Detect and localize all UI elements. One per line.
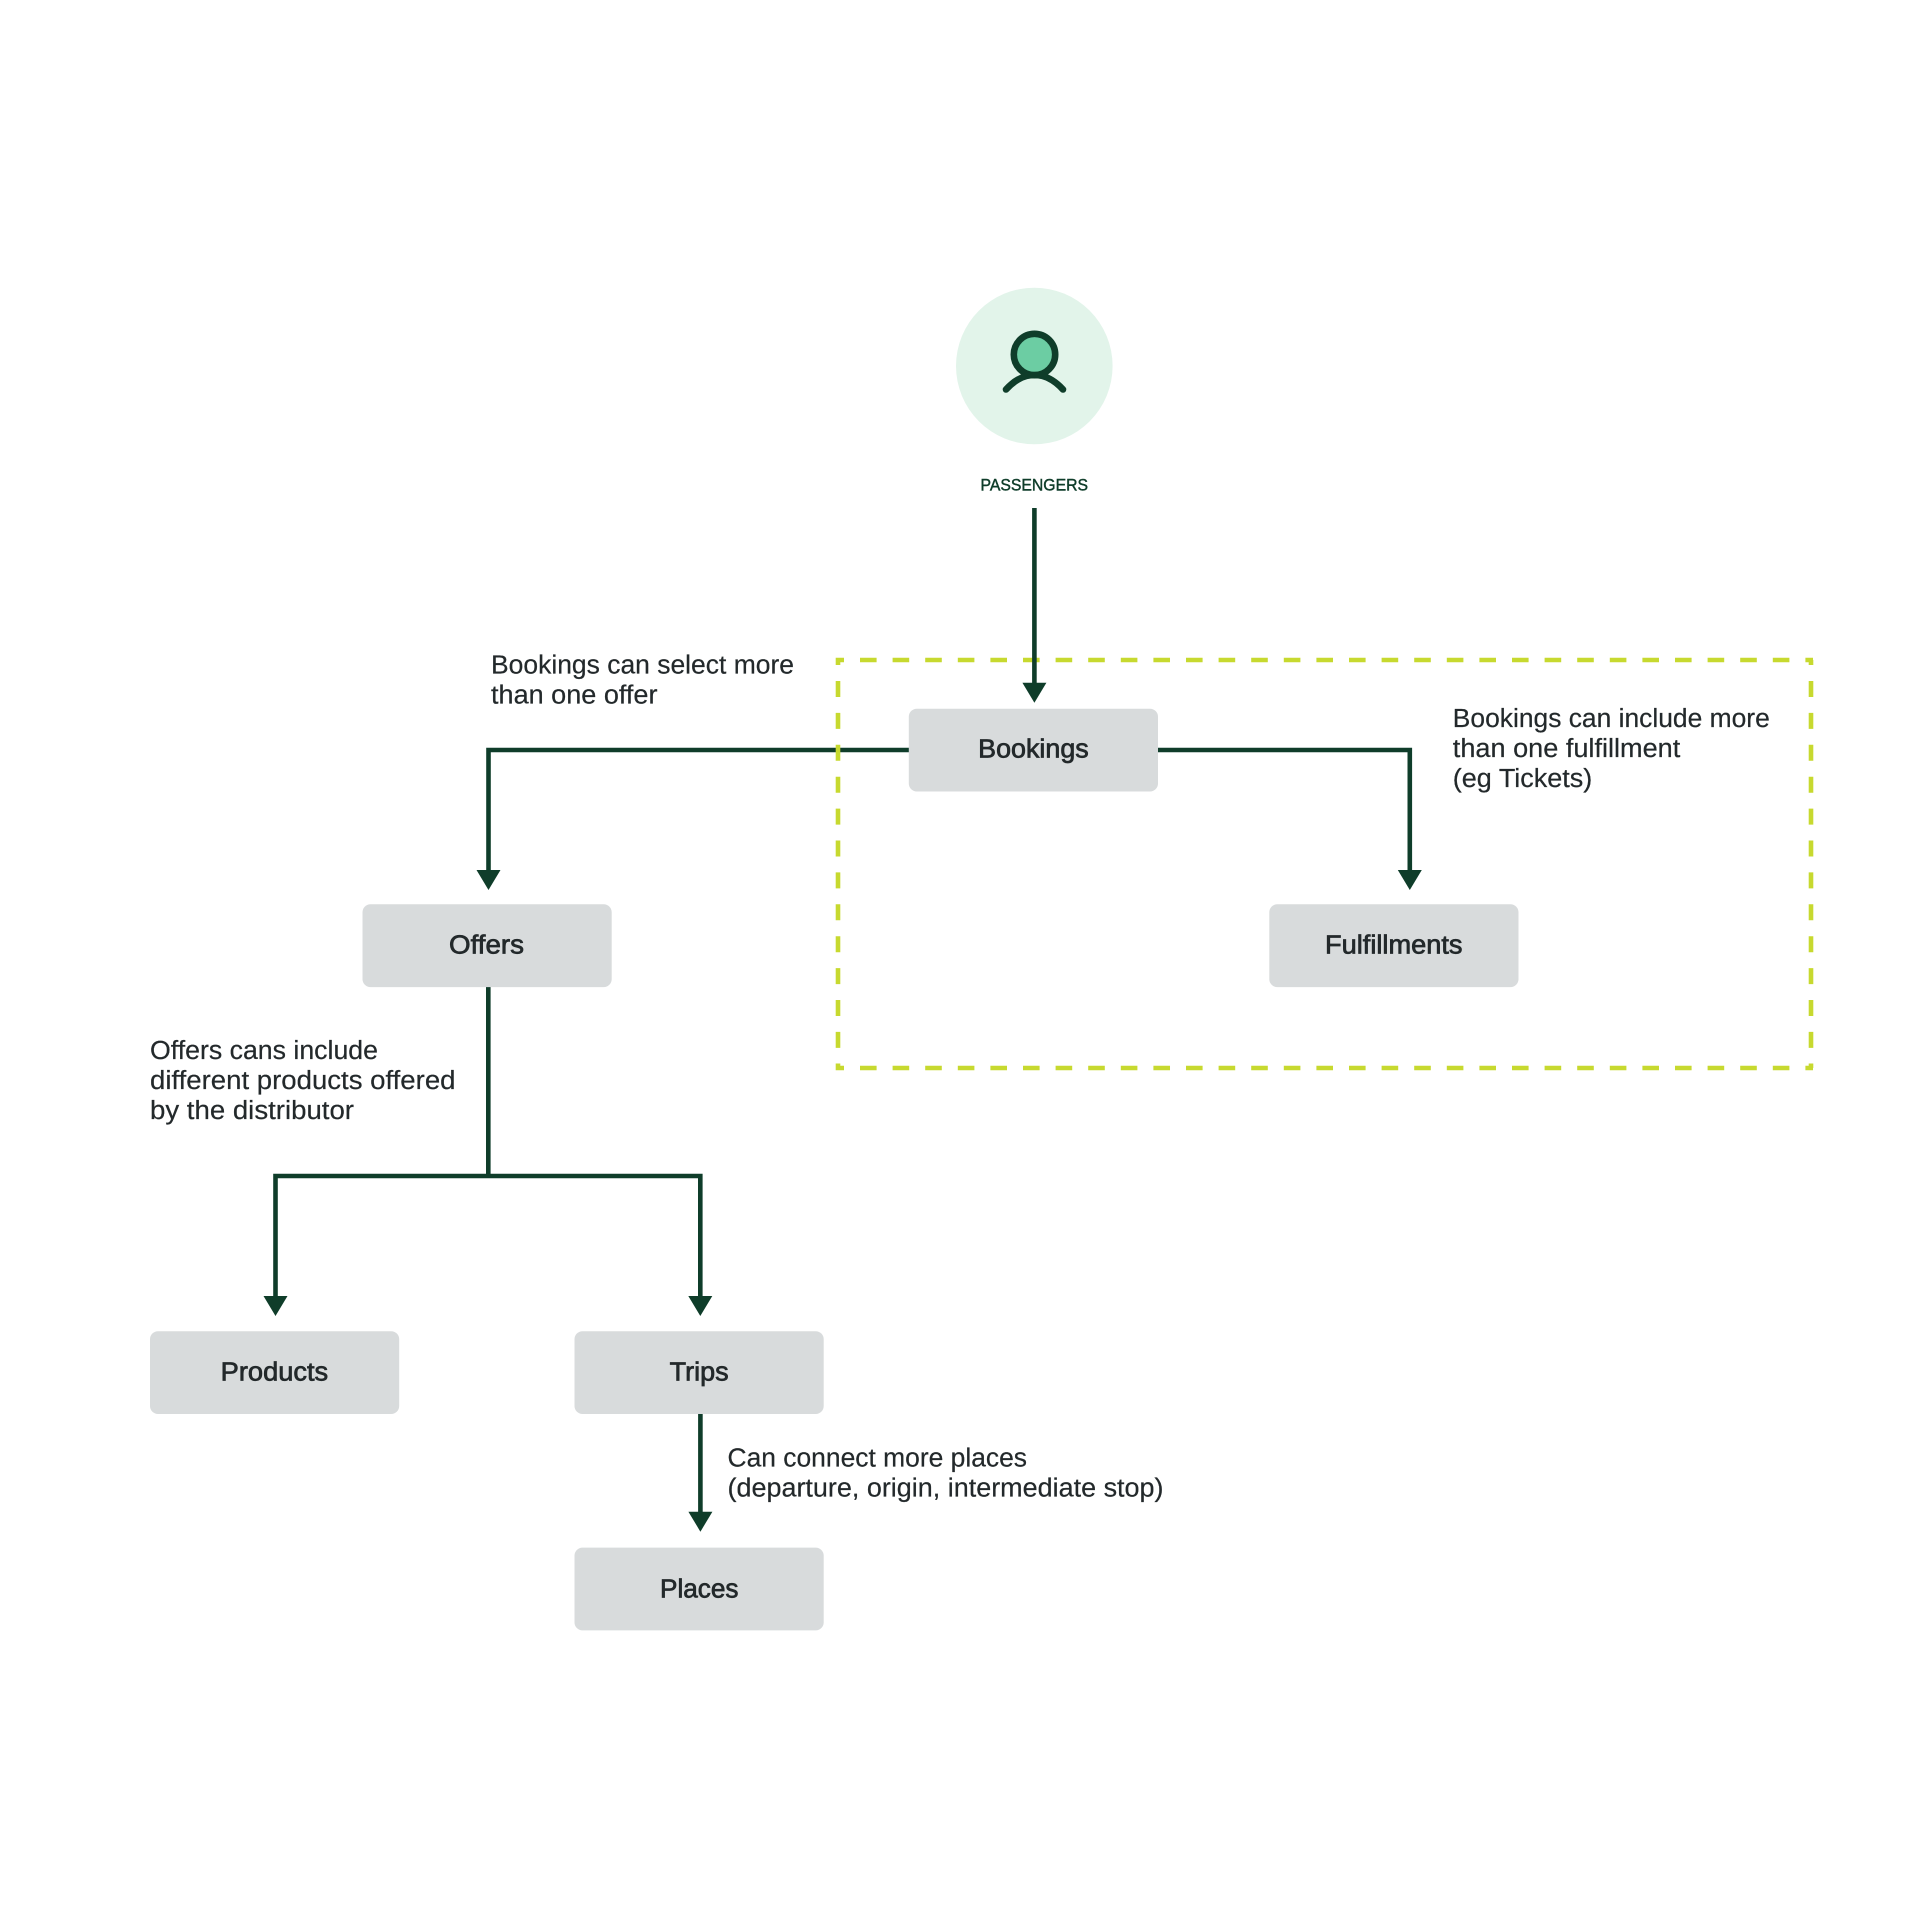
box: products: Products [221, 1359, 328, 1387]
text: bookings include fulfillments: (eg Tickets) [1453, 765, 1592, 793]
icon: passenger [956, 288, 1113, 444]
arrow: offers to products and trips [264, 987, 712, 1316]
box: trips: Trips [670, 1359, 729, 1387]
arrow: trips to places [688, 1413, 712, 1532]
box: offers [362, 904, 612, 987]
box: trips [574, 1331, 824, 1414]
arrow: bookings to fulfillments [1158, 750, 1422, 890]
text: bookings include fulfillments: than one fulfillment [1453, 735, 1680, 763]
text: trips connect places: (departure, origin, intermediate stop) [728, 1475, 1164, 1503]
text: bookings select offers: than one offer [491, 681, 658, 709]
text: offers include products: Offers cans include [150, 1037, 378, 1065]
box: places: Places [660, 1575, 738, 1603]
panel: dashed booking scope [838, 660, 1813, 1068]
box: bookings [909, 709, 1158, 792]
text: bookings select offers [491, 651, 794, 709]
text: bookings include fulfillments [1453, 705, 1770, 793]
text: offers include products: by the distributor [150, 1097, 355, 1125]
text: bookings select offers: Bookings can select more [491, 651, 794, 679]
text: offers include products: different products offered [150, 1067, 456, 1095]
box: bookings: Bookings [978, 736, 1089, 764]
text: bookings include fulfillments: Bookings can include more [1453, 705, 1770, 733]
box: places [574, 1548, 824, 1630]
arrow: passengers to bookings [1022, 508, 1046, 703]
box: fulfillments: Fulfillments [1325, 932, 1462, 960]
box: fulfillments [1269, 904, 1518, 987]
text: trips connect places: Can connect more places [728, 1445, 1027, 1473]
text: offers include products [150, 1037, 456, 1125]
arrow: bookings to offers [476, 750, 909, 890]
text: trips connect places [728, 1445, 1164, 1503]
heading: passengers: PASSENGERS [980, 477, 1088, 495]
box: offers: Offers [449, 932, 524, 960]
box: products [150, 1331, 399, 1414]
